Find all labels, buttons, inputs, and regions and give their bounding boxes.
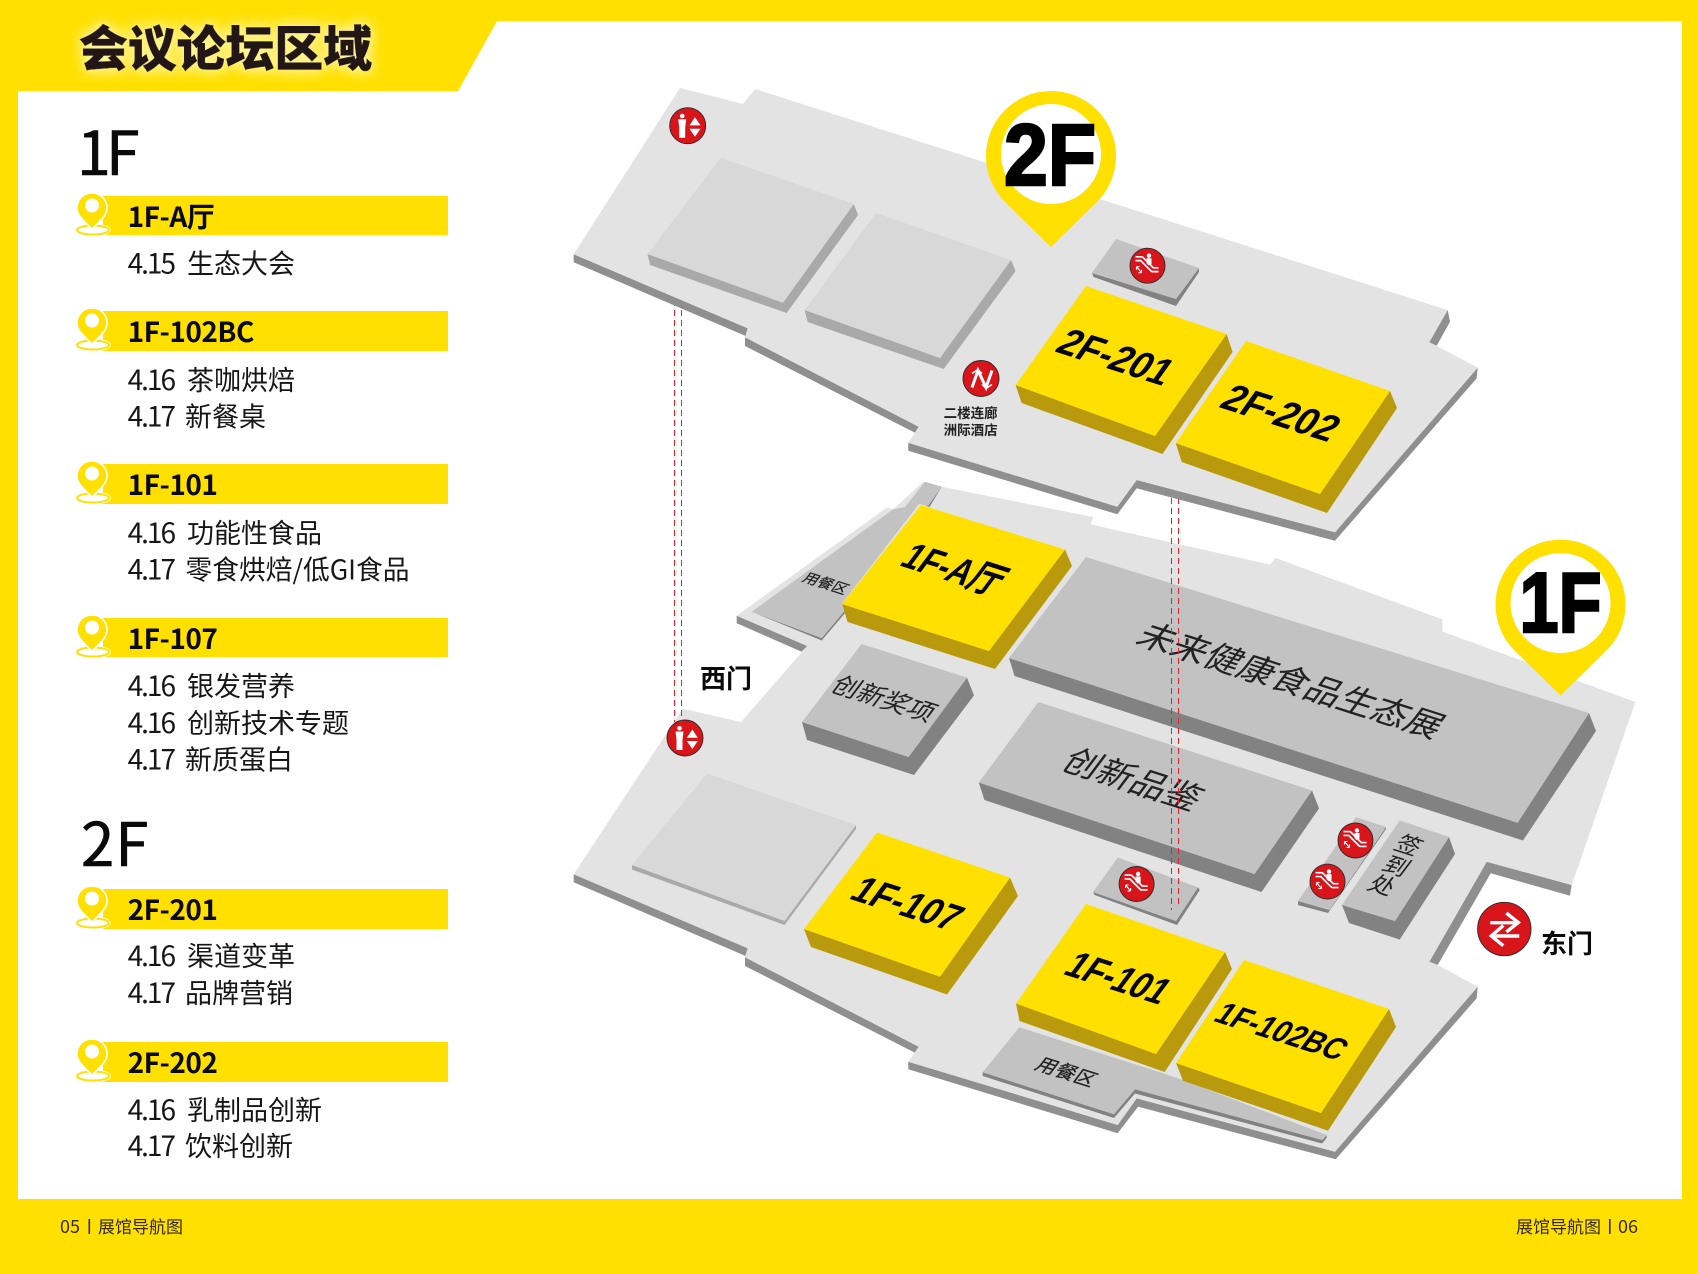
item: 1F-102BC: 新餐桌 xyxy=(185,396,266,434)
footer: right page number xyxy=(1516,1213,1638,1239)
panel: schedule list xyxy=(77,104,448,1165)
item: 1F-101: 零食烘焙/低GI食品 xyxy=(186,549,410,588)
pin: 2F xyxy=(986,91,1116,247)
item: 1F-A hall: 1F-A厅 xyxy=(128,196,214,236)
dining area: south: 用餐区 xyxy=(1030,1050,1105,1092)
room: 1F-101 xyxy=(1016,904,1232,1072)
label: sky bridge: 二楼连廊 xyxy=(944,402,998,422)
pin: 1F xyxy=(1496,540,1626,696)
item: 1F-107: 4.17 xyxy=(128,738,175,778)
check-in desk: 签到处: 签 xyxy=(1388,826,1432,861)
check-in desk: 签到处: 处 xyxy=(1362,866,1406,901)
item: 1F-107: 创新技术专题 xyxy=(187,702,349,741)
room: 2F-201: 2F-201 xyxy=(1048,321,1184,393)
dining area: west: 用餐区 xyxy=(798,568,854,599)
hall: 未来健康食品生态展: 未来健康食品生态展 xyxy=(1127,611,1458,747)
item: 2F-201: 品牌营销 xyxy=(185,972,293,1011)
icon: escalator 2F xyxy=(1130,248,1165,283)
room: 1F-101: 1F-101 xyxy=(1056,944,1181,1012)
item: 2F-201: 2F-201 xyxy=(128,889,217,929)
label: east door: 东门 xyxy=(1541,924,1593,961)
footer: right page number: 展馆导航图 xyxy=(1516,1213,1601,1238)
dining area: south xyxy=(983,1027,1327,1144)
room: 1F-102BC xyxy=(1176,960,1396,1131)
room: 1F-A hall: 1F-A厅 xyxy=(893,535,1015,603)
item: 1F-102BC: 4.16 xyxy=(128,359,175,399)
heading: 1F: 1F xyxy=(77,104,138,193)
icon: lift 2F xyxy=(670,108,706,144)
item: 2F-202: 饮料创新 xyxy=(185,1125,293,1164)
icon: escalator centre xyxy=(1119,866,1154,902)
item: 1F-107: 银发营养 xyxy=(187,665,295,704)
item: 2F-202: 乳制品创新 xyxy=(187,1089,322,1128)
footer: left page number: 05 xyxy=(60,1213,80,1239)
label: west door: 西门 xyxy=(700,659,752,696)
icon: east door xyxy=(1478,902,1531,956)
escalator pad xyxy=(1092,239,1199,306)
room: 2F-202 xyxy=(1176,341,1397,513)
room: 1F-102BC: 1F-102BC xyxy=(1207,996,1356,1067)
hall: 创新奖项 xyxy=(802,644,974,775)
pin: 2F: 2F xyxy=(1004,107,1096,204)
icon: sky bridge xyxy=(963,360,999,396)
item: 2F-201: 4.16 xyxy=(128,935,175,975)
item: 1F-107: 4.16 xyxy=(128,665,175,705)
icon: lift 1F xyxy=(667,720,703,756)
hall: 创新品鉴: 创新品鉴 xyxy=(1053,736,1216,820)
pin: 1F: 1F xyxy=(1520,556,1602,651)
item: 1F-107 xyxy=(77,615,448,778)
dashed guide lines between floors xyxy=(674,300,1178,910)
item: 1F-101 xyxy=(77,461,448,589)
item: 2F-202: 2F-202 xyxy=(128,1042,217,1082)
item: 1F-107: 新质蛋白 xyxy=(185,738,293,778)
item: 2F-201: 4.17 xyxy=(128,972,175,1012)
floor plan: 2F xyxy=(574,88,1478,541)
hall: 创新奖项: 创新奖项 xyxy=(824,667,946,728)
item: 1F-101: 功能性食品 xyxy=(187,512,322,551)
hall: 未来健康食品生态展 xyxy=(1009,557,1596,840)
item: 2F-202: 4.16 xyxy=(128,1089,175,1129)
check-in desk: 签到处 xyxy=(1342,820,1455,940)
item: 2F-201 xyxy=(77,886,448,1012)
item: 1F-A hall: 4.15 xyxy=(128,242,175,282)
footer: right page number: 06 xyxy=(1618,1213,1638,1239)
icon: escalator east upper xyxy=(1338,823,1373,858)
item: 1F-107: 4.16 xyxy=(128,702,175,742)
item: 2F-202: 4.17 xyxy=(128,1125,175,1165)
item: 1F-102BC: 4.17 xyxy=(128,396,175,436)
item: 1F-107: 1F-107 xyxy=(128,618,217,658)
room: 2F-202: 2F-202 xyxy=(1212,377,1350,450)
floor slab xyxy=(574,482,1635,1159)
item: 2F-201: 渠道变革 xyxy=(187,935,295,974)
icon: escalator east lower xyxy=(1310,864,1345,899)
item: 1F-101: 4.17 xyxy=(128,549,175,589)
hall: 创新品鉴 xyxy=(979,702,1319,892)
check-in desk: 签到处: 到 xyxy=(1376,847,1420,882)
room: 2F-201 xyxy=(1016,286,1233,454)
footer: left page number: 展馆导航图 xyxy=(98,1213,183,1238)
item: 1F-A hall: 生态大会 xyxy=(187,242,295,282)
heading: 2F: 2F xyxy=(81,797,149,884)
room: unnamed grey block xyxy=(632,774,856,925)
item: 1F-102BC xyxy=(77,308,448,436)
escalator pad: east xyxy=(1298,817,1386,913)
item: 1F-101: 1F-101 xyxy=(128,464,217,504)
room: grey block west xyxy=(648,158,858,313)
escalator pad: centre xyxy=(1093,858,1200,925)
dining area: west xyxy=(752,482,942,640)
label: sky bridge xyxy=(944,402,998,439)
item: 1F-A hall xyxy=(77,193,448,282)
item: 1F-101: 4.16 xyxy=(128,512,175,552)
room: 1F-107 xyxy=(804,832,1018,994)
footer: left page number xyxy=(60,1213,183,1239)
item: 1F-102BC: 茶咖烘焙 xyxy=(187,359,295,398)
item: 2F-202 xyxy=(77,1039,448,1165)
item: 1F-102BC: 1F-102BC xyxy=(128,311,254,351)
room: 1F-A hall xyxy=(842,505,1072,669)
floor slab xyxy=(574,88,1478,541)
room: grey block east xyxy=(805,213,1016,369)
floor plan: 1F xyxy=(574,482,1635,1159)
room: 1F-107: 1F-107 xyxy=(842,869,973,938)
title: 会议论坛区域 xyxy=(79,10,372,80)
label: sky bridge: 洲际酒店 xyxy=(944,419,998,439)
